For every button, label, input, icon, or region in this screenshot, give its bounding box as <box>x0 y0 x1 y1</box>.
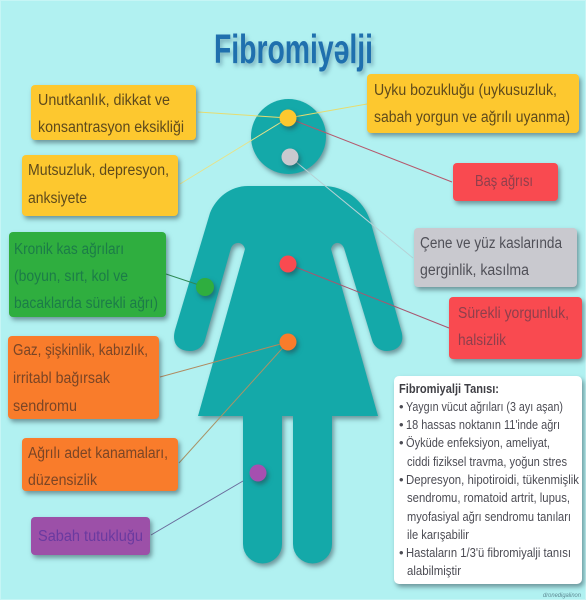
callout: bowel <box>8 336 159 419</box>
callout: muscle pain: bacaklarda sürekli ağrı) <box>14 295 158 312</box>
callout: jaw: Çene ve yüz kaslarında <box>420 235 562 252</box>
leader line: menstrual <box>179 342 288 463</box>
dot: green arm <box>196 278 214 296</box>
diagnosis list: 18 hassas noktanın 11'inde ağrı <box>406 417 560 432</box>
diagnosis list: • <box>399 399 404 414</box>
diagnosis list: Öyküde enfeksiyon, ameliyat, <box>406 435 550 450</box>
callout: fatigue: Sürekli yorgunluk, <box>458 305 569 322</box>
callout: morning stiffness <box>31 517 150 555</box>
diagnosis list <box>399 399 579 578</box>
leader line: fatigue <box>288 264 449 328</box>
leader line: unhappiness <box>180 118 288 184</box>
callout: bowel: irritabl bağırsak <box>13 370 110 387</box>
callout: sleep: sabah yorgun ve ağrılı uyanma) <box>374 109 570 126</box>
callout: menstrual: düzensizlik <box>28 472 97 489</box>
callout: jaw <box>414 228 577 287</box>
diagnosis list: • <box>399 435 404 450</box>
callout: morning stiffness: Sabah tutukluğu <box>38 528 143 545</box>
callout: menstrual <box>22 438 178 491</box>
callout: sleep: Uyku bozukluğu (uykusuzluk, <box>374 82 557 99</box>
callout: forgetfulness <box>31 85 196 140</box>
callout: bowel: sendromu <box>13 398 77 415</box>
watermark: dronedigalinon <box>543 593 582 599</box>
figure: woman silhouette <box>174 99 402 564</box>
diagnosis list: • <box>399 472 404 487</box>
callout: headache: Baş ağrısı <box>475 173 533 190</box>
callout: fatigue: halsizlik <box>458 332 506 349</box>
callout: headache <box>453 163 558 201</box>
callout: sleep <box>367 74 579 133</box>
callout: muscle pain: Kronik kas ağrıları <box>14 241 124 258</box>
panel: diagnosis <box>394 376 582 584</box>
callout: unhappiness: Mutsuzluk, depresyon, <box>28 162 169 179</box>
callout: bowel: Gaz, şişkinlik, kabızlık, <box>13 342 148 359</box>
leader line: morning stiffness <box>151 481 243 535</box>
callout: menstrual: Ağrılı adet kanamaları, <box>28 445 168 462</box>
dot: red chest <box>280 256 296 272</box>
dot: orange abdomen <box>280 334 296 350</box>
dot: grey jaw <box>282 148 298 166</box>
leader line: muscle pain <box>166 274 205 287</box>
callout: unhappiness: anksiyete <box>28 190 87 207</box>
leader line: headache <box>288 118 452 182</box>
callout: muscle pain <box>9 232 166 317</box>
callout: unhappiness <box>22 155 178 216</box>
leader line: jaw <box>290 157 413 258</box>
dot: purple leg <box>250 464 266 482</box>
diagnosis list: • <box>399 545 404 560</box>
callout: forgetfulness: Unutkanlık, dikkat ve <box>38 92 170 109</box>
title: Fibromiyəlji <box>214 26 373 72</box>
panel heading: Fibromiyalji Tanısı: <box>399 381 499 396</box>
leader line: sleep <box>288 104 367 118</box>
leader line: forgetfulness <box>198 112 288 118</box>
leader line: bowel <box>160 342 288 377</box>
dot: yellow head <box>280 110 296 126</box>
diagnosis list: alabilmiştir <box>407 563 462 578</box>
callout: fatigue <box>449 297 582 359</box>
diagnosis list: • <box>399 417 404 432</box>
callout: forgetfulness: konsantrasyon eksikliği <box>38 119 184 136</box>
callout: jaw: gerginlik, kasılma <box>420 262 529 279</box>
callout: muscle pain: (boyun, sırt, kol ve <box>14 268 128 285</box>
diagnosis list: ile karışabilir <box>407 527 470 542</box>
